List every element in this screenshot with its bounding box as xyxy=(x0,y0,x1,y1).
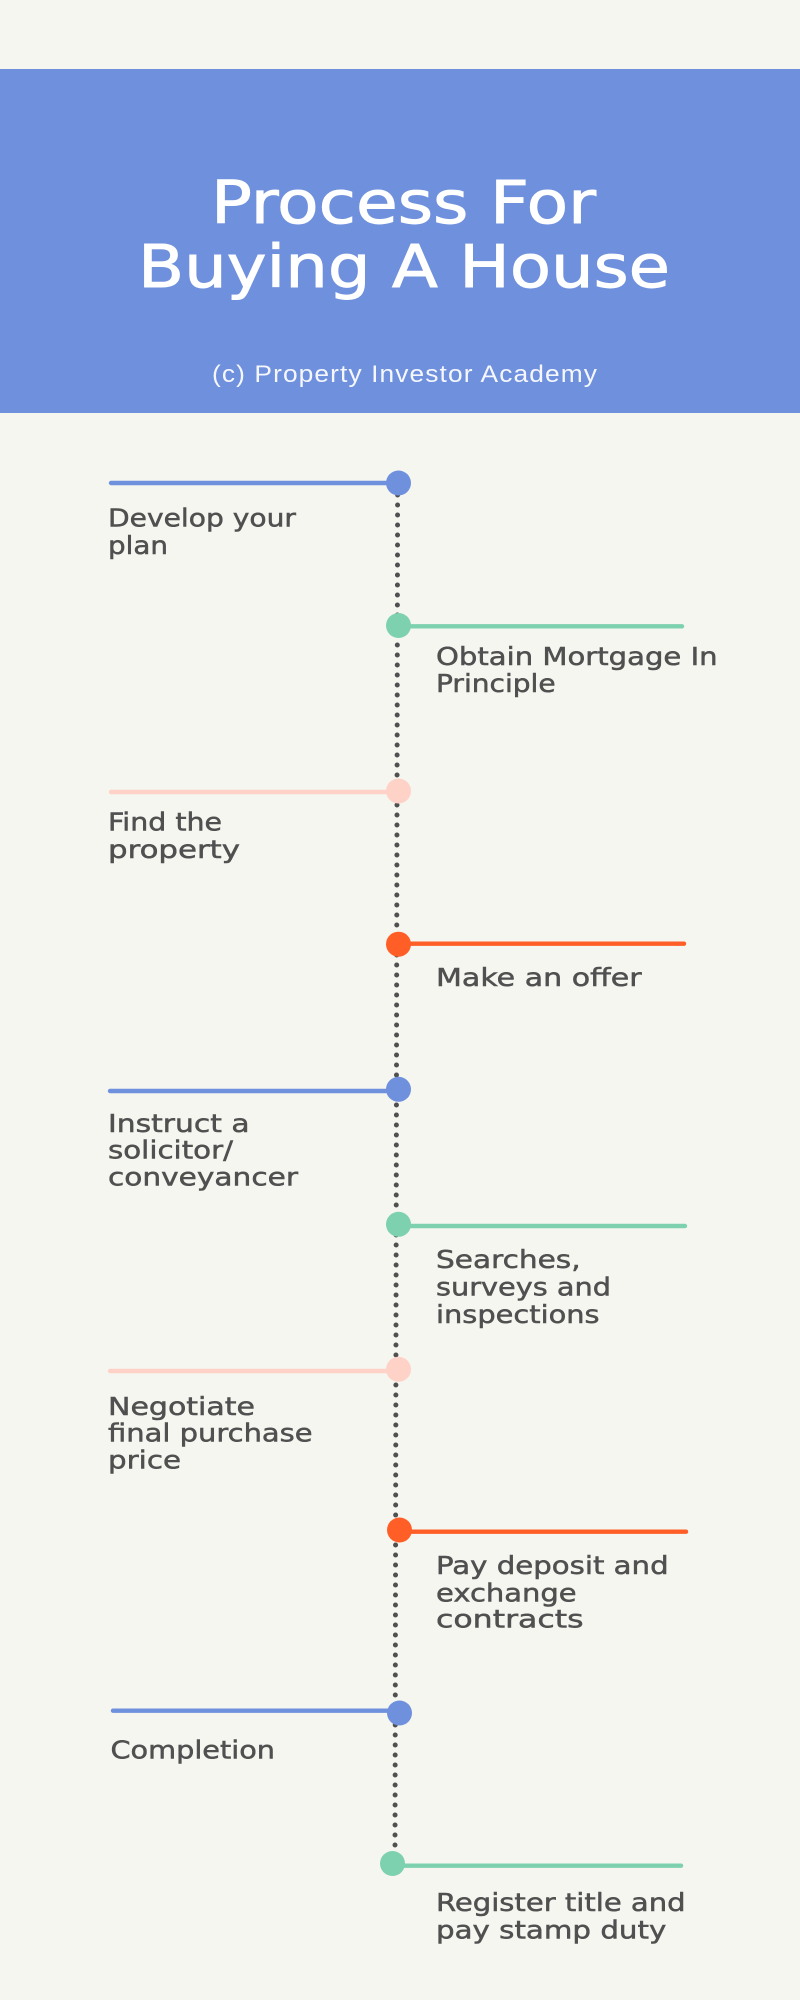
step 3: find the property xyxy=(108,778,411,864)
label: Find the xyxy=(108,808,222,837)
label: contracts xyxy=(436,1605,584,1634)
label xyxy=(108,808,240,864)
step 4: make an offer xyxy=(386,932,684,992)
marker dot xyxy=(386,470,411,496)
label: Principle xyxy=(436,669,556,698)
step 6: searches, surveys and inspections xyxy=(386,1212,685,1329)
marker dot xyxy=(386,613,411,638)
step 5: instruct a solicitor xyxy=(108,1077,411,1192)
connector line xyxy=(110,1369,398,1373)
step 1: develop your plan xyxy=(108,470,411,560)
label: pay stamp duty xyxy=(436,1915,667,1944)
marker dot xyxy=(386,1077,411,1102)
label xyxy=(108,1392,313,1475)
label: exchange xyxy=(436,1578,577,1607)
connector line xyxy=(111,481,398,485)
connector line xyxy=(110,1089,398,1093)
label: Negotiate xyxy=(108,1392,255,1421)
dotted timeline spine xyxy=(395,495,398,1846)
label xyxy=(436,1551,669,1634)
connector line xyxy=(113,1708,399,1713)
subtitle: attribution: (c) Property Investor Academy xyxy=(212,361,598,388)
connector line xyxy=(392,1863,681,1868)
step 9: completion xyxy=(110,1700,412,1765)
title xyxy=(138,168,670,301)
panel: header banner xyxy=(0,69,800,413)
step 10: register title and pay stamp duty xyxy=(380,1851,686,1944)
label: Make an offer xyxy=(436,963,642,992)
connector line xyxy=(399,1529,686,1534)
label: Instruct a xyxy=(108,1109,250,1138)
marker dot xyxy=(386,1212,411,1237)
connector line xyxy=(398,624,682,628)
label: Pay deposit and xyxy=(436,1551,669,1580)
label: price xyxy=(108,1446,181,1475)
marker dot xyxy=(387,1518,412,1542)
label: conveyancer xyxy=(108,1163,299,1192)
marker dot xyxy=(387,1700,412,1726)
label: Develop your xyxy=(108,504,297,533)
label: Obtain Mortgage In xyxy=(436,642,718,671)
connector line xyxy=(111,790,398,794)
step 7: negotiate final purchase price xyxy=(108,1357,411,1475)
label: final purchase xyxy=(108,1419,313,1448)
banner background xyxy=(0,69,800,413)
label: solicitor/ xyxy=(108,1136,234,1165)
label xyxy=(436,642,718,698)
marker dot xyxy=(386,778,411,804)
step 8: pay deposit and exchange contracts xyxy=(387,1518,686,1634)
label: Completion xyxy=(110,1736,275,1765)
label: inspections xyxy=(436,1300,600,1329)
label: Register title and xyxy=(436,1888,686,1917)
label xyxy=(436,1245,611,1329)
title: Process For xyxy=(211,168,597,237)
label xyxy=(108,504,297,560)
label: Searches, xyxy=(436,1245,581,1274)
connector line xyxy=(398,1224,685,1228)
step 2: obtain mortgage in principle xyxy=(386,613,718,698)
title: Buying A House xyxy=(138,232,670,301)
label: property xyxy=(108,835,240,864)
label xyxy=(436,1888,686,1944)
marker dot xyxy=(386,932,411,957)
marker dot xyxy=(380,1851,405,1876)
marker dot xyxy=(386,1357,411,1382)
label: plan xyxy=(108,531,168,560)
label xyxy=(108,1109,299,1192)
connector line xyxy=(398,942,684,946)
label: surveys and xyxy=(436,1273,611,1302)
